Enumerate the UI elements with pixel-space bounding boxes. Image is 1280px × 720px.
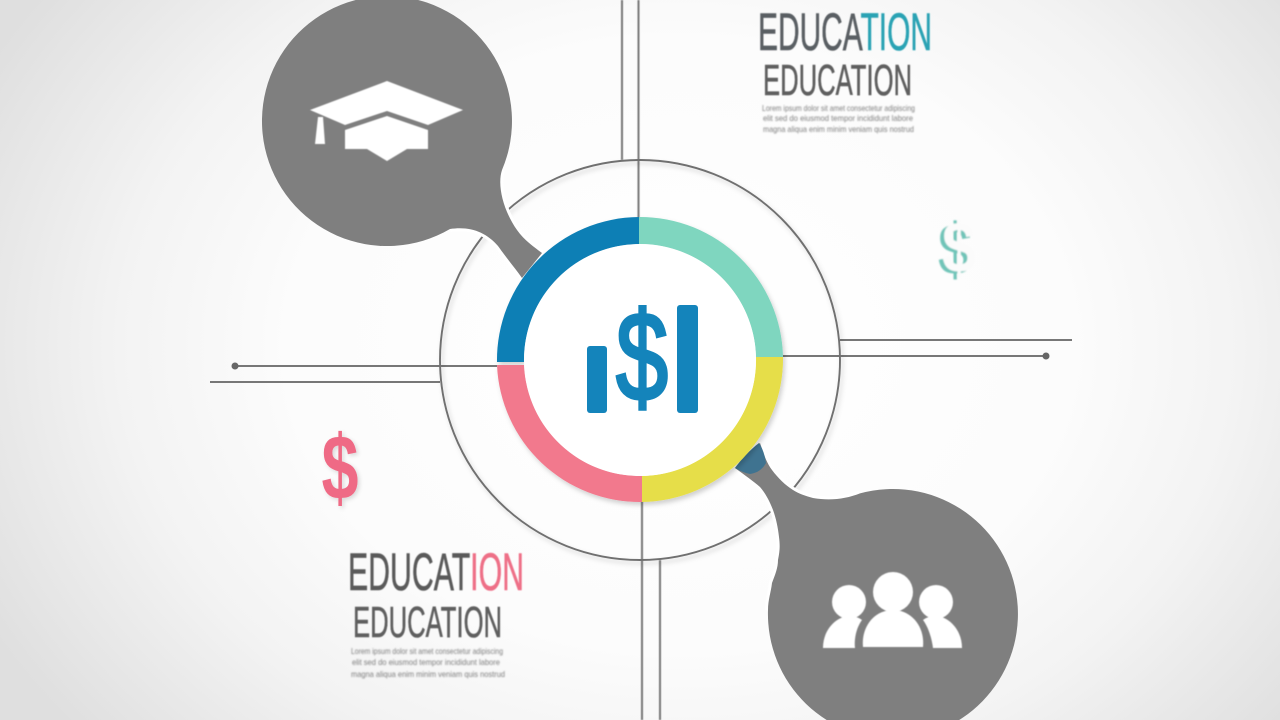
bubble: graduation — [262, 0, 542, 278]
text block: top right — [758, 3, 932, 134]
tail halo — [735, 443, 860, 610]
segment: pink — [497, 365, 642, 502]
body text: magna aliqua enim minim veniam quis nostrud — [763, 124, 914, 134]
vertical lines: bottom — [642, 500, 660, 720]
text block: bottom left — [348, 543, 524, 679]
segment: yellow — [642, 357, 783, 502]
bubble shape with tail — [735, 443, 1018, 720]
icon: pink dollar: $ — [322, 417, 358, 519]
connector lines: right — [783, 340, 1072, 360]
tail halo — [450, 170, 542, 278]
body text: Lorem ipsum dolor sit amet consectetur adipiscing — [351, 646, 503, 656]
segment: green — [639, 217, 783, 357]
heading: teal accent: EDUCATION — [758, 3, 932, 62]
bubble: people — [735, 443, 1018, 720]
outer circle — [440, 160, 840, 560]
segment: blue — [497, 217, 639, 362]
donut ring — [497, 217, 783, 502]
body text: magna aliqua enim minim veniam quis nostrud — [351, 669, 505, 679]
icon: faded teal dollar: $ — [942, 208, 976, 288]
connector lines: left — [210, 362, 497, 382]
heading: pink accent: EDUCATION — [348, 543, 524, 602]
center white disc — [524, 244, 756, 476]
body text: elit sed do eiusmod tempor incididunt labore — [352, 657, 500, 667]
body text: elit sed do eiusmod tempor incididunt labore — [763, 113, 913, 123]
icon: center dollar with bars — [587, 286, 698, 427]
subheading: EDUCATION — [353, 598, 502, 647]
icon: graduation cap — [310, 81, 463, 161]
body text: Lorem ipsum dolor sit amet consectetur adipiscing — [762, 103, 915, 113]
vertical lines: top — [622, 0, 638, 218]
icon: faded teal dollar: $ — [938, 210, 972, 290]
body text — [351, 646, 505, 679]
icon: center dollar with bars: $ — [616, 286, 668, 427]
subheading: EDUCATION — [763, 56, 912, 105]
connector knob — [735, 443, 766, 474]
bubble shape with tail — [262, 0, 542, 278]
icon: people — [823, 572, 962, 648]
body text — [762, 103, 915, 134]
